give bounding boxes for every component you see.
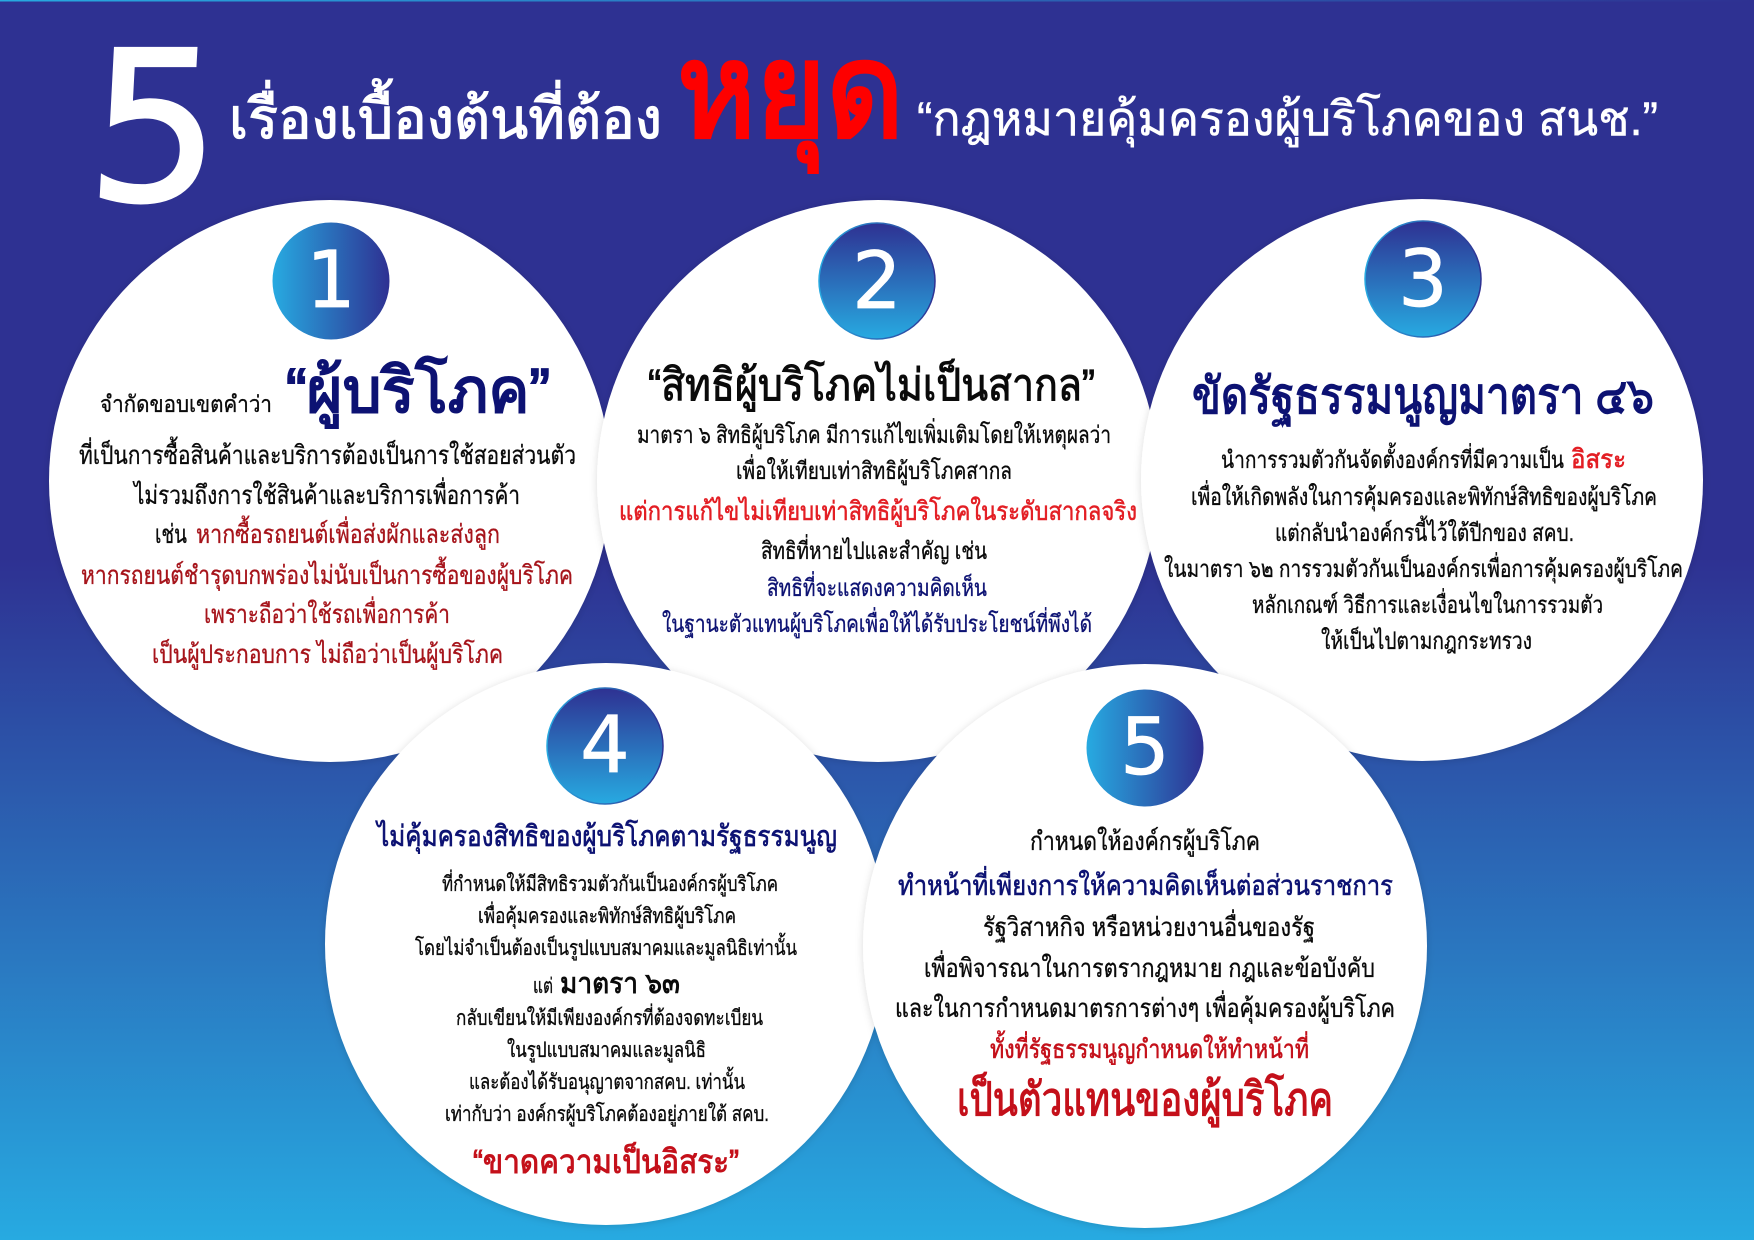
badge 1: 1 — [306, 236, 356, 326]
panel: circle 3 — [1141, 199, 1703, 761]
body text: ที่เป็นการซื้อสินค้าและบริการต้องเป็นการใช้สอยส่วนตัว — [79, 436, 576, 470]
body text: รัฐวิสาหกิจ หรือหน่วยงานอื่นของรัฐ — [983, 909, 1315, 943]
badge 1 — [272, 222, 390, 340]
title: stop word: หยุด — [677, 17, 904, 174]
body text: ในรูปแบบสมาคมและมูลนิธิ — [507, 1038, 706, 1063]
body text: แต่ — [533, 975, 553, 998]
body text: ทำหน้าที่เพียงการให้ความคิดเห็นต่อส่วนราชการ — [898, 866, 1393, 901]
body text: เพื่อพิจารณาในการตรากฎหมาย กฎและข้อบังคับ — [924, 950, 1375, 983]
body text: มาตรา ๖ สิทธิผู้บริโภค มีการแก้ไขเพิ่มเติมโดยให้เหตุผลว่า — [637, 418, 1111, 450]
heading: consumer definition — [100, 356, 550, 428]
body text: สิทธิที่หายไปและสำคัญ เช่น — [761, 534, 987, 565]
panel: circle 1 — [49, 200, 611, 762]
heading: violates constitution section 46: ขัดรัฐธรรมนูญมาตรา ๔๖ — [1192, 368, 1654, 426]
title: subject: “กฎหมายคุ้มครองผู้บริโภคของ สนช.” — [917, 92, 1658, 148]
body text: เพื่อคุ้มครองและพิทักษ์สิทธิผู้บริโภค — [478, 901, 736, 929]
body text: เพื่อให้เทียบเท่าสิทธิผู้บริโภคสากล — [736, 454, 1012, 486]
body text — [1164, 442, 1683, 655]
body text: และในการกำหนดมาตรการต่างๆ เพื่อคุ้มครองผู้บริโภค — [895, 990, 1395, 1024]
big number 5: 5 — [82, 8, 227, 250]
panel: circle 4 — [325, 663, 887, 1225]
panel: circle 5 — [863, 664, 1427, 1228]
panel: circle 2 — [597, 200, 1159, 762]
badge 2: 2 — [852, 237, 902, 327]
body text: เท่ากับว่า องค์กรผู้บริโภคต้องอยู่ภายใต้ สคบ. — [445, 1102, 769, 1127]
heading: does not protect constitutional rights: ไม่คุ้มครองสิทธิของผู้บริโภคตามรัฐธรรมนูญ — [375, 819, 837, 854]
body text: หลักเกณฑ์ วิธีการและเงื่อนไขในการรวมตัว — [1252, 588, 1603, 619]
body text: มาตรา ๖๓ — [560, 968, 680, 1000]
body text: ในฐานะตัวแทนผู้บริโภคเพื่อให้ได้รับประโยชน์ที่พึงได้ — [662, 607, 1092, 639]
body text: แต่กลับนำองค์กรนี้ไว้ใต้ปีกของ สคบ. — [1275, 515, 1574, 547]
body text: หากซื้อรถยนต์เพื่อส่งผักและส่งลูก — [196, 515, 500, 550]
body text: อิสระ — [1571, 444, 1626, 474]
body text: เช่น — [155, 519, 187, 549]
body text — [79, 436, 576, 670]
body text: ที่กำหนดให้มีสิทธิรวมตัวกันเป็นองค์กรผู้บริโภค — [442, 869, 778, 897]
body text: กำหนดให้องค์กรผู้บริโภค — [1030, 826, 1260, 857]
body text: แต่การแก้ไขไม่เทียบเท่าสิทธิผู้บริโภคในระดับสากลจริง — [619, 496, 1137, 527]
callout: lacks independence: “ขาดความเป็นอิสระ” — [473, 1142, 739, 1180]
body text: ให้เป็นไปตามกฎกระทรวง — [1321, 626, 1532, 655]
badge 5 — [1086, 690, 1204, 806]
badge 5: 5 — [1120, 703, 1170, 793]
title: first part: เรื่องเบื้องต้นที่ต้อง — [229, 79, 662, 150]
body text: หากรถยนต์ชำรุดบกพร่องไม่นับเป็นการซื้อของผู้บริโภค — [81, 556, 573, 591]
body text: เพราะถือว่าใช้รถเพื่อการค้า — [204, 596, 450, 629]
top edge line — [0, 0, 1754, 2]
badge 3 — [1365, 221, 1481, 337]
body text: ทั้งที่รัฐธรรมนูญกำหนดให้ทำหน้าที่ — [990, 1030, 1309, 1065]
body text: ไม่รวมถึงการใช้สินค้าและบริการเพื่อการค้า — [132, 477, 520, 510]
heading: consumer definition: “ผู้บริโภค” — [286, 356, 550, 428]
badge 4: 4 — [580, 701, 630, 791]
body text — [415, 869, 797, 1127]
heading: rights not universal: “สิทธิผู้บริโภคไม่เป็นสากล” — [648, 359, 1095, 412]
callout: be the consumer representative: เป็นตัวแทนของผู้บริโภค — [957, 1072, 1333, 1127]
body text: สิทธิที่จะแสดงความคิดเห็น — [767, 571, 987, 602]
heading: consumer definition: จำกัดขอบเขตคำว่า — [100, 391, 272, 417]
badge 4 — [547, 688, 663, 804]
badge 3: 3 — [1398, 235, 1448, 325]
body text: กลับเขียนให้มีเพียงองค์กรที่ต้องจดทะเบียน — [456, 1003, 763, 1030]
body text — [619, 418, 1137, 639]
body text: เป็นผู้ประกอบการ ไม่ถือว่าเป็นผู้บริโภค — [152, 638, 503, 670]
body text: โดยไม่จำเป็นต้องเป็นรูปแบบสมาคมและมูลนิธิเท่านั้น — [415, 933, 797, 961]
body text: นำการรวมตัวกันจัดตั้งองค์กรที่มีความเป็น — [1221, 442, 1564, 474]
badge 2 — [819, 223, 935, 339]
body text — [895, 826, 1395, 1065]
body text: และต้องได้รับอนุญาตจากสคบ. เท่านั้น — [469, 1067, 745, 1095]
